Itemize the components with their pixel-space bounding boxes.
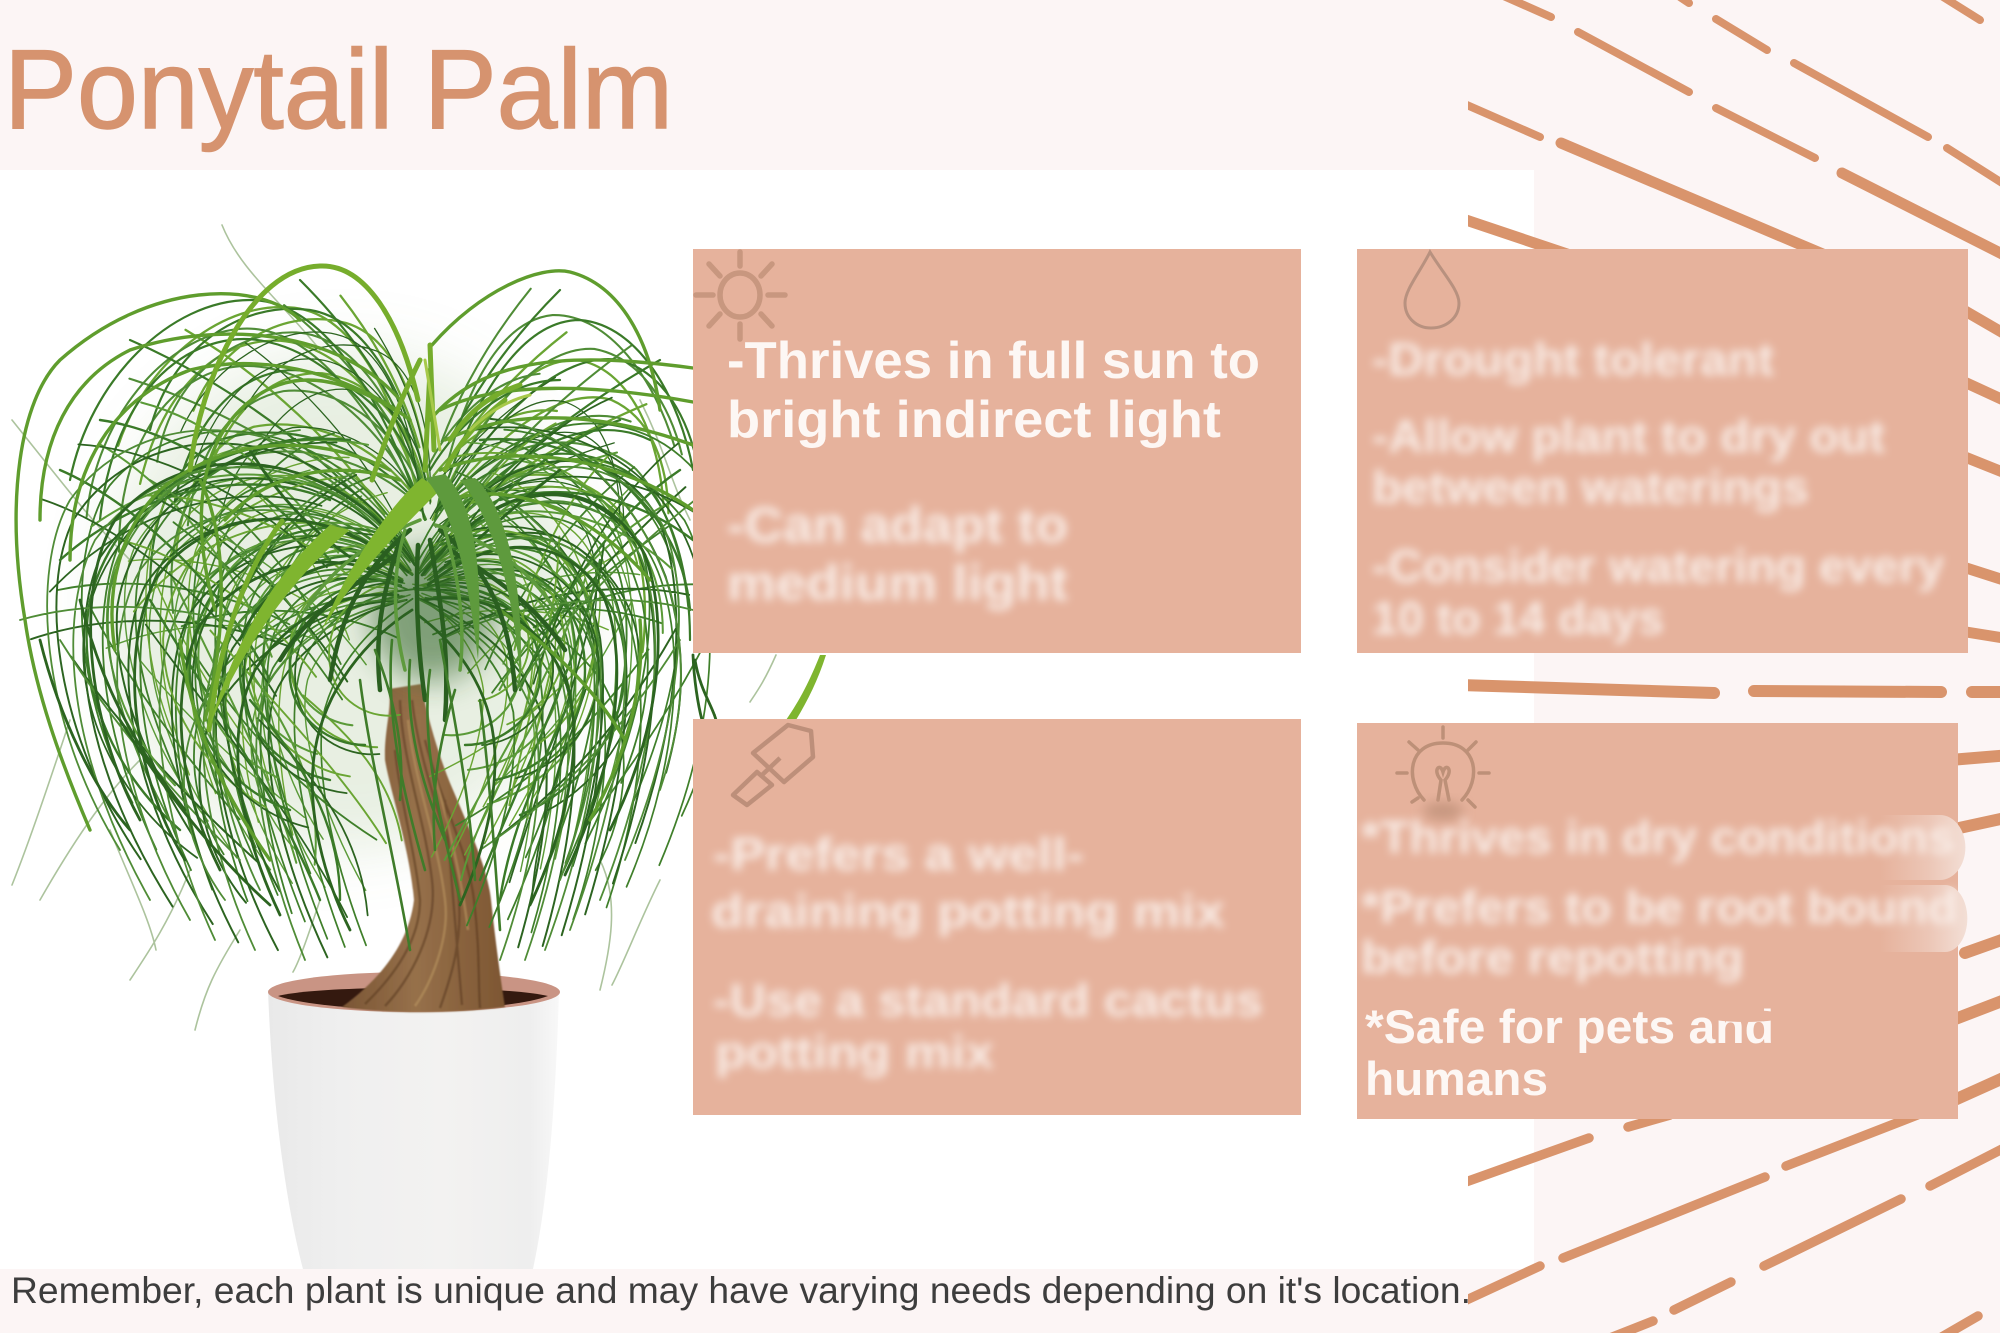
- dense strand layers: [30, 278, 716, 958]
- blurred care text: *Thrives in dry conditions: [1361, 811, 1955, 863]
- panel: watering: [1357, 249, 1968, 653]
- card background: [1357, 249, 1968, 653]
- bold care text: humans: [1365, 1052, 1548, 1105]
- icon: water drop: [1405, 252, 1459, 328]
- panel: soil: [693, 719, 1301, 1115]
- dark strands: [40, 450, 716, 930]
- blurred care text: draining potting mix: [711, 885, 1225, 937]
- bold care text: bright indirect light: [727, 391, 1221, 449]
- core radiating blades: [280, 530, 565, 720]
- footer note: Remember, each plant is unique and may have varying needs depending on it's location.: [11, 1270, 1471, 1311]
- panel: good to know: [1357, 723, 1967, 1119]
- blurred care text: potting mix: [715, 1026, 994, 1078]
- blurred care text: before repotting: [1361, 931, 1744, 983]
- blurred care text: 10 to 14 days: [1372, 592, 1664, 644]
- blurred care text: between waterings: [1372, 461, 1809, 513]
- fine pale strands: [12, 225, 776, 1030]
- bold care text: [1365, 1000, 1774, 1105]
- blurred care text: -Can adapt to: [727, 497, 1068, 553]
- blurred care text: -Prefers a well-: [713, 828, 1084, 880]
- soft foliage tone: [105, 350, 585, 850]
- thin mid-green strands: [20, 420, 695, 960]
- icon: trowel: [733, 725, 813, 805]
- leaves: [12, 225, 826, 1030]
- blurred care text: -Allow plant to dry out: [1372, 410, 1885, 462]
- card background: [1357, 723, 1958, 1119]
- blurred care text: -Drought tolerant: [1372, 333, 1774, 385]
- blurred care text: -Use a standard cactus: [713, 974, 1263, 1026]
- title: Ponytail Palm: [4, 27, 673, 152]
- white photo panel: [0, 170, 1534, 1269]
- trunk: [342, 684, 505, 1012]
- blurred care text: *Prefers to be root bound: [1361, 881, 1958, 933]
- bold care text: [727, 332, 1260, 449]
- card background: [693, 719, 1301, 1115]
- blurred care text: [1361, 811, 1958, 983]
- bold care text: *Safe for pets and: [1365, 1000, 1774, 1053]
- icon: sun: [696, 252, 785, 339]
- plant photo: ponytail palm in white pot: [12, 225, 826, 1269]
- blur lobes past card edge: [1880, 815, 1967, 952]
- bright yellow-green arcs and centre blades: [190, 266, 520, 730]
- blurred care text: [711, 828, 1263, 1078]
- broad centre blades: [208, 478, 826, 730]
- card background: [693, 249, 1301, 653]
- dark crown core: [370, 549, 494, 681]
- retouch smudge over text: [1705, 1010, 1785, 1022]
- background sunburst dashes: [1460, 0, 2000, 1333]
- blurred care text: [727, 497, 1068, 611]
- blurred care text: [1372, 333, 1944, 644]
- icon: light bulb: [1397, 727, 1489, 807]
- blurred care text: medium light: [727, 555, 1068, 611]
- bright arching strands: [16, 271, 693, 860]
- panel: light needs: [693, 249, 1301, 653]
- icon smudge: [1423, 802, 1463, 820]
- pot: [268, 972, 560, 1269]
- blurred care text: -Consider watering every: [1372, 540, 1944, 592]
- strands over trunk: [360, 640, 500, 950]
- bold care text: -Thrives in full sun to: [727, 332, 1260, 390]
